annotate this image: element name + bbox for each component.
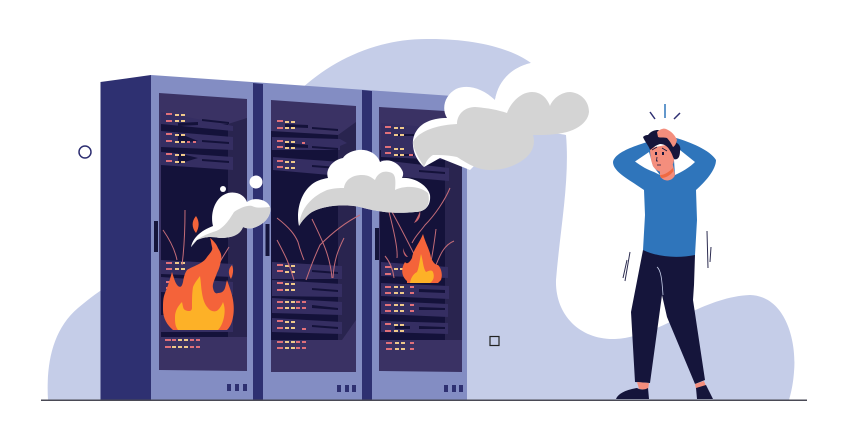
inner flame (410, 254, 434, 283)
ankle (637, 381, 706, 390)
background blob (48, 39, 794, 400)
person (613, 104, 716, 399)
facial features (652, 147, 667, 165)
white gaps under arms (635, 150, 695, 175)
rack front (151, 75, 467, 400)
alarm lines (650, 104, 680, 119)
server panel 3 (379, 107, 462, 372)
fire left (163, 216, 234, 330)
smoke cloud 3 (413, 87, 589, 170)
eyes (655, 152, 664, 155)
flame tips (193, 216, 233, 279)
smoke puffs (250, 176, 262, 188)
server panel 1 (159, 93, 247, 371)
neck (660, 165, 675, 180)
rack side (100, 75, 151, 400)
pant crease (657, 267, 663, 295)
shoes (616, 385, 713, 399)
rack vents (227, 384, 463, 392)
server rack cabinet (100, 75, 467, 400)
decorative square (490, 336, 499, 346)
fire right (402, 234, 442, 283)
burned wires (163, 188, 454, 280)
hair (643, 130, 680, 159)
small ember (403, 211, 420, 257)
rack handles (154, 221, 379, 260)
hand (657, 129, 677, 147)
legs (631, 250, 705, 384)
decorative circle (79, 146, 91, 158)
smoke cloud 1 (191, 176, 270, 247)
rack dividers (253, 83, 372, 400)
outer flame (163, 238, 234, 330)
face (650, 144, 674, 173)
motion lines (623, 231, 711, 281)
smoke cloud 2 (298, 150, 430, 226)
white halo behind cloud 3 (495, 63, 586, 135)
sweater (613, 138, 716, 257)
outer flame (402, 234, 442, 283)
ground line (41, 400, 807, 401)
inner flame (175, 276, 225, 330)
neck shadow (660, 168, 674, 178)
server panel 2 (271, 100, 356, 372)
